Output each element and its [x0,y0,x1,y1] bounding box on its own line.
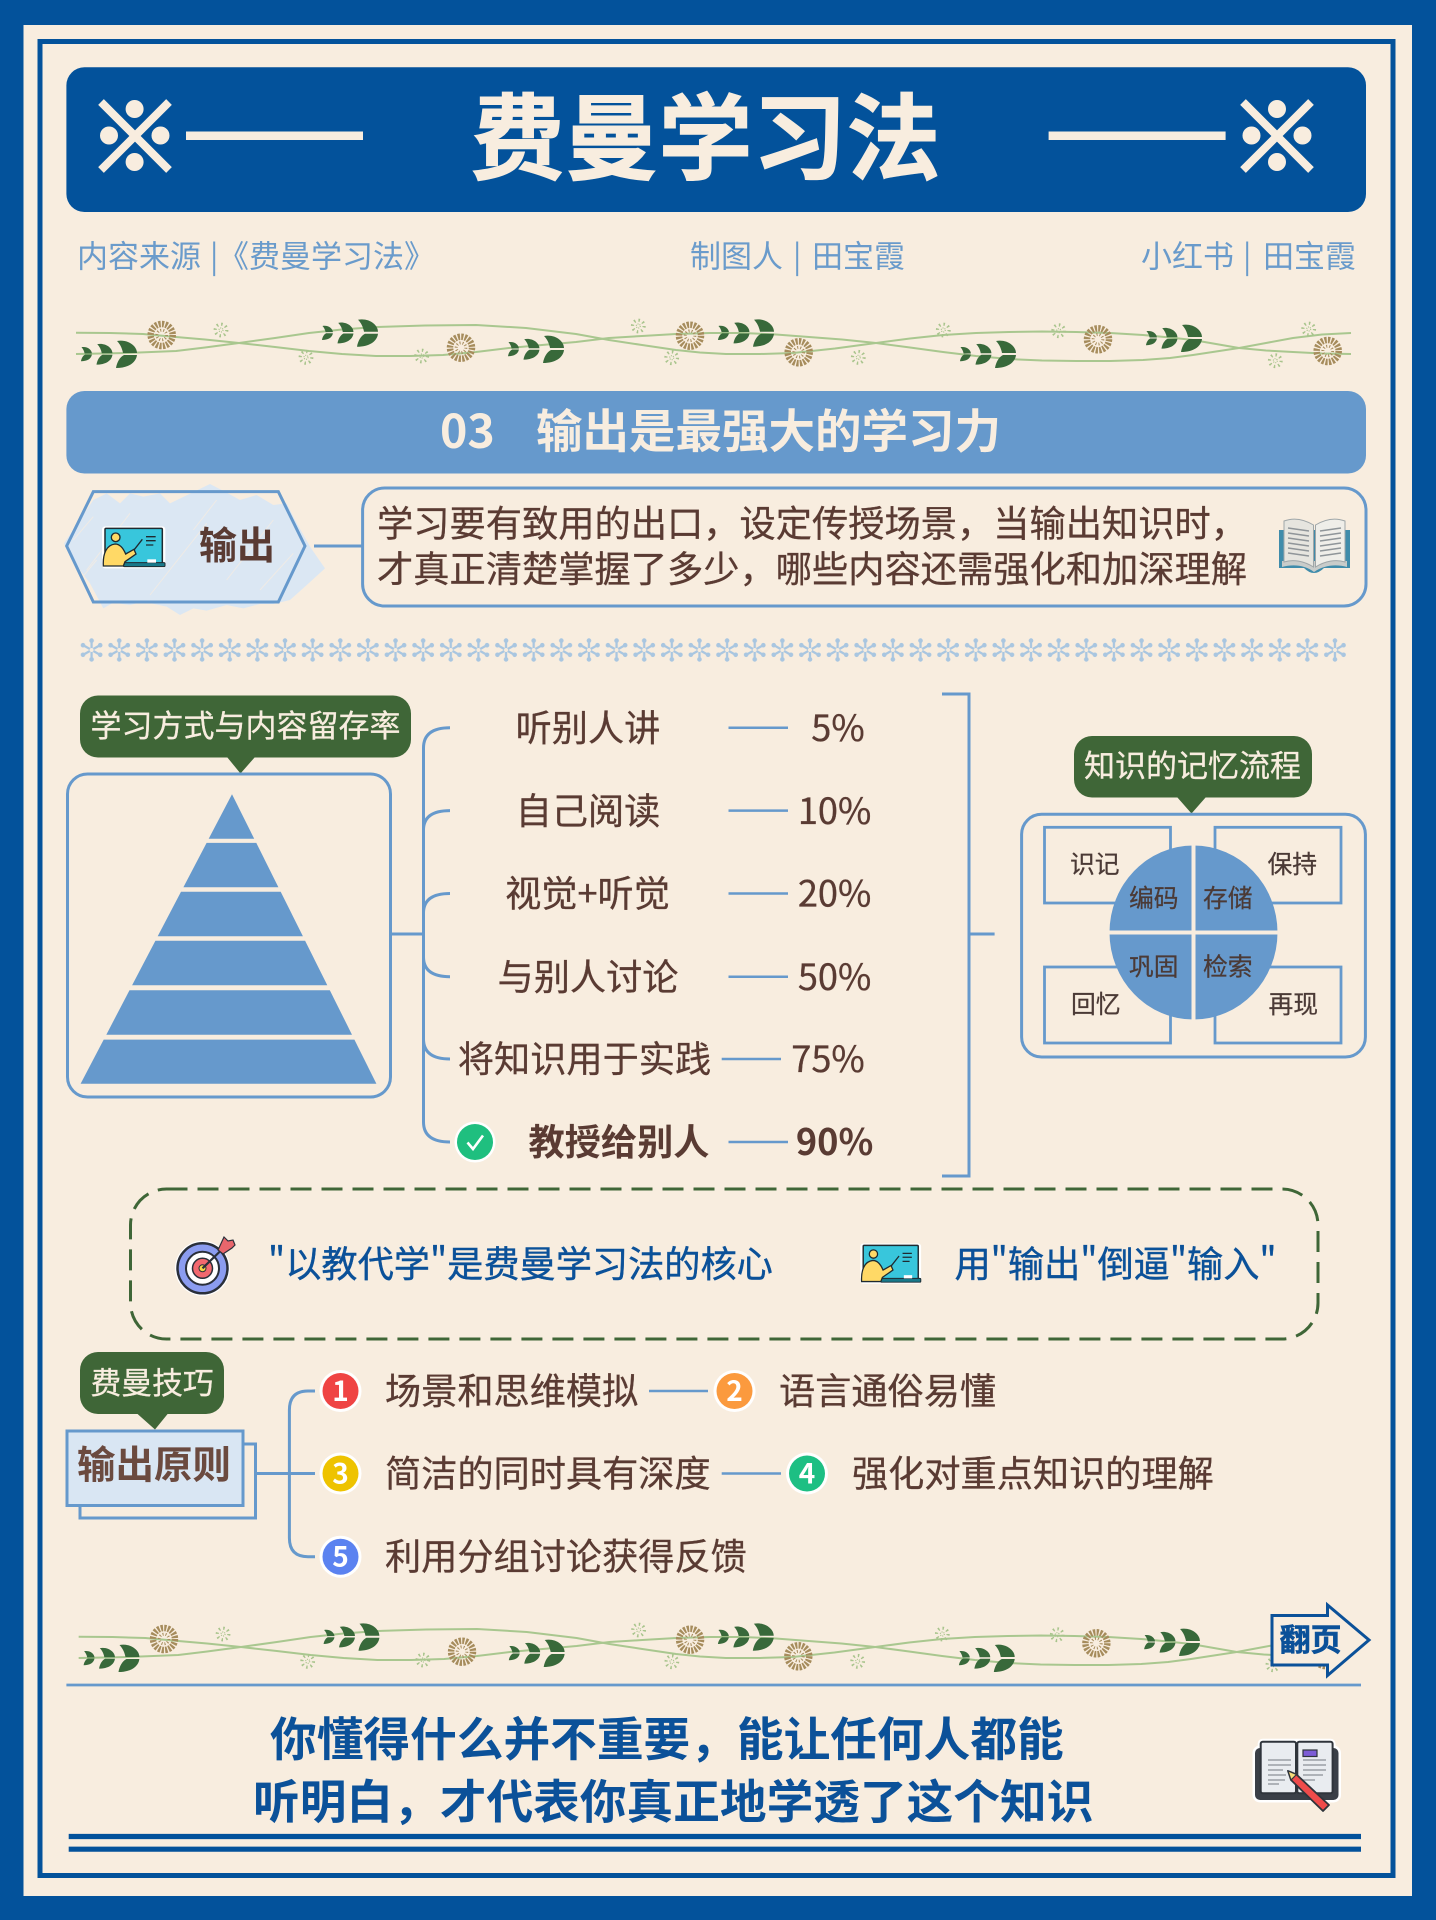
section heading bar [66,391,1366,474]
memory labels: 保持 [1268,845,1317,881]
row: reading: 自己阅读 [516,783,660,835]
source credit: 《费曼学习法》 [218,232,435,276]
principle 5: 利用分组讨论获得反馈 [385,1529,747,1581]
callout text: core idea: "以教代学"是费曼学习法的核心 [268,1236,773,1288]
pyramid panel [68,774,390,1097]
memory labels: 存储 [1203,879,1253,915]
principle 3: 简洁的同时具有深度 [385,1446,711,1498]
row: discussion [498,949,871,1001]
output principles box [67,1431,256,1518]
arrow: turn page [1272,1605,1369,1676]
row: reading: 10% [798,783,871,835]
source credit: 内容来源 [77,232,201,276]
icon: green check [454,1122,496,1162]
label: feynman technique [80,1352,224,1430]
connector [314,544,363,548]
memory labels: 回忆 [1071,985,1121,1021]
row: reading [516,783,871,835]
label: learning retention: 学习方式与内容留存率 [90,701,400,746]
principle list [320,1363,1214,1581]
principle 1 [320,1363,708,1415]
source credit: | [210,232,218,276]
icon: left reference mark [100,100,363,171]
description text: 才真正清楚掌握了多少，哪些内容还需强化和加深理解 [377,541,1247,593]
principle 2: 语言通俗易懂 [779,1363,996,1415]
output description box [363,488,1366,606]
row: listening [516,700,865,752]
xiaohongshu credit: 小红书 [1141,232,1234,276]
description text: 学习要有致用的出口，设定传授场景，当输出知识时， [377,496,1247,548]
snowflake divider [78,638,1349,662]
row: teach others: 教授给别人 [529,1114,709,1166]
row: practice [458,1031,865,1083]
memory diagram panel [1022,814,1365,1057]
row: audiovisual [505,866,871,918]
section heading bar: 输出是最强大的学习力 [536,395,1001,462]
designer credit: | [793,232,801,276]
row: practice: 将知识用于实践 [458,1031,711,1083]
designer credit: 田宝霞 [812,232,905,276]
principle 4: 4 [799,1452,815,1492]
label: learning retention [80,696,411,774]
title banner [66,64,1366,212]
icon: teacher at board [102,526,165,568]
closing quote: 听明白，才代表你真正地学透了这个知识 [253,1766,1093,1832]
row: teach others: 90% [796,1114,873,1166]
icon: teacher [860,1243,921,1284]
principle 4: 强化对重点知识的理解 [852,1446,1214,1498]
closing quote: 你懂得什么并不重要，能让任何人都能 [270,1703,1064,1770]
row: listening: 听别人讲 [516,700,660,752]
pyramid chart [81,794,376,1084]
retention rows [454,700,873,1166]
xiaohongshu credit: 田宝霞 [1263,232,1356,276]
row: discussion: 50% [798,949,871,1001]
footer double rule [69,1836,1361,1849]
label: memory process: 知识的记忆流程 [1084,741,1301,786]
principle 5: 5 [332,1536,349,1576]
output badge [64,484,325,615]
row: audiovisual: 20% [798,866,871,918]
icon: right reference mark [1049,100,1312,171]
row: teach others [454,1114,873,1166]
badge label: 输出 [199,515,275,570]
row: practice: 75% [791,1031,865,1083]
title: 费曼学习法 [470,64,941,200]
tree connector: principles [256,1391,315,1557]
callout text: output forces input: 用"输出"倒逼"输入" [954,1236,1277,1288]
principle 3: 3 [332,1452,349,1492]
tree connector: methods [390,728,450,1142]
dashed callout [130,1189,1318,1339]
principle 1: 1 [332,1370,349,1410]
label: feynman technique: 费曼技巧 [90,1358,214,1403]
designer credit: 制图人 [690,232,783,276]
label: memory process [1074,736,1312,814]
quadrant circle [1105,840,1282,1025]
row: discussion: 与别人讨论 [498,949,678,1001]
memory labels: 识记 [1070,845,1120,881]
row: listening: 5% [811,700,865,752]
description text [377,496,1247,593]
memory labels: 编码 [1129,879,1179,915]
section heading bar: 03 [440,395,495,462]
right bracket [942,694,995,1176]
memory labels: 检索 [1203,948,1253,984]
memory labels: 再现 [1268,985,1318,1021]
source and author row [77,232,1356,276]
principle 2: 2 [726,1370,743,1410]
icon: open book [1279,519,1350,573]
output principles box: 输出原则 [77,1434,231,1490]
xiaohongshu credit: | [1243,232,1251,276]
closing quote [253,1703,1093,1832]
arrow: turn page: 翻页 [1280,1615,1342,1660]
principle 1: 场景和思维模拟 [385,1363,638,1415]
row: audiovisual: 视觉+听觉 [505,866,670,918]
memory labels [1070,845,1318,1021]
icon: target [175,1237,235,1296]
memory labels: 巩固 [1129,948,1179,984]
icon: book and pencil [1255,1742,1338,1811]
